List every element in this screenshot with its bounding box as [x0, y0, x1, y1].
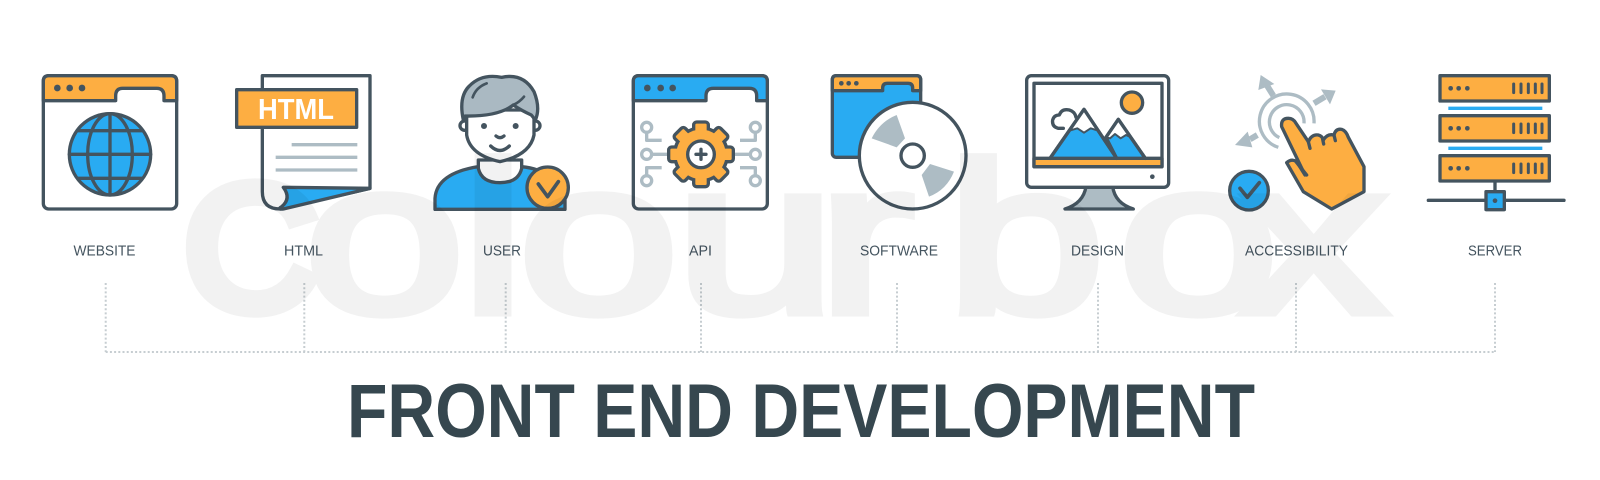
icon: server — [1428, 76, 1564, 210]
label: user: USER — [483, 244, 521, 260]
label: html: HTML — [284, 244, 323, 260]
watermark: x — [1242, 117, 1386, 358]
icon: user — [435, 76, 568, 209]
watermark: C — [184, 150, 318, 347]
watermark: o — [1119, 117, 1278, 358]
label: accessibility: ACCESSIBILITY — [1245, 244, 1348, 260]
title: FRONT END DEVELOPMENT — [347, 369, 1255, 454]
watermark: r — [818, 117, 914, 358]
label: api: API — [689, 244, 712, 260]
dotted connector — [106, 283, 1495, 352]
watermark: o — [305, 117, 464, 358]
icon: api — [633, 76, 767, 209]
icon: design monitor — [1027, 76, 1169, 209]
icon: html document — [237, 76, 370, 209]
watermark: o — [519, 117, 678, 358]
label: website: WEBSITE — [74, 244, 136, 260]
labels — [74, 244, 1522, 260]
watermark: l — [462, 120, 524, 358]
icon: accessibility — [1230, 75, 1364, 210]
icon: software — [832, 76, 966, 209]
watermark — [184, 117, 1386, 358]
icon text: HTML: HTML — [258, 94, 334, 126]
label: design: DESIGN — [1071, 244, 1124, 260]
label: server: SERVER — [1468, 244, 1522, 260]
label: software: SOFTWARE — [860, 244, 938, 260]
icon: website — [43, 76, 177, 209]
watermark: u — [676, 117, 835, 358]
watermark: b — [947, 120, 1105, 358]
